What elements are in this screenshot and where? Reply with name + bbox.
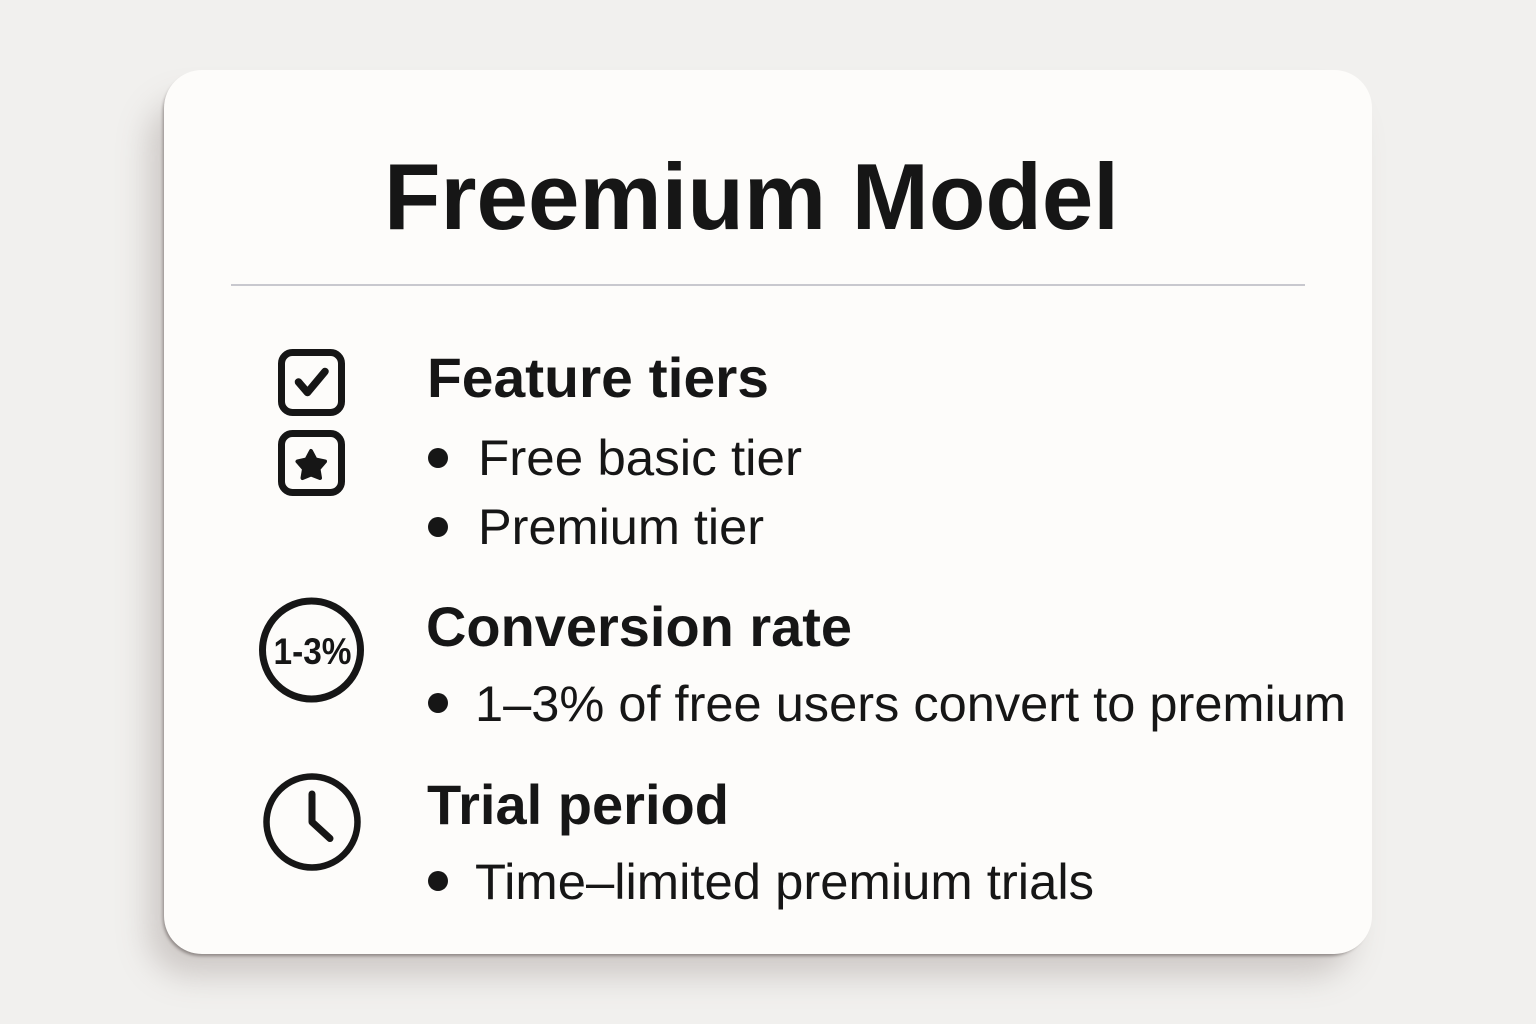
bullet: conversion detail: 1–3% of free users convert to premium xyxy=(475,676,1346,732)
section: trial period xyxy=(266,773,1094,910)
icon: checkbox xyxy=(282,352,342,412)
heading: trial period: Trial period xyxy=(427,773,729,836)
heading: feature tiers: Feature tiers xyxy=(427,346,769,409)
bullet: trial detail: Time–limited premium trials xyxy=(475,854,1094,910)
section: feature tiers xyxy=(282,346,802,555)
bullet: premium tier: Premium tier xyxy=(478,499,764,555)
title: Freemium Model xyxy=(384,144,1119,249)
icon: 1-3% badge xyxy=(262,601,360,699)
section: conversion rate xyxy=(262,595,1346,732)
icon: clock xyxy=(266,776,358,868)
icon: 1-3% badge: 1-3% xyxy=(274,631,352,672)
bullet: free basic tier: Free basic tier xyxy=(478,430,802,486)
heading: conversion rate: Conversion rate xyxy=(426,595,852,658)
icon: star box xyxy=(282,434,342,492)
panel: freemium card xyxy=(164,70,1372,954)
